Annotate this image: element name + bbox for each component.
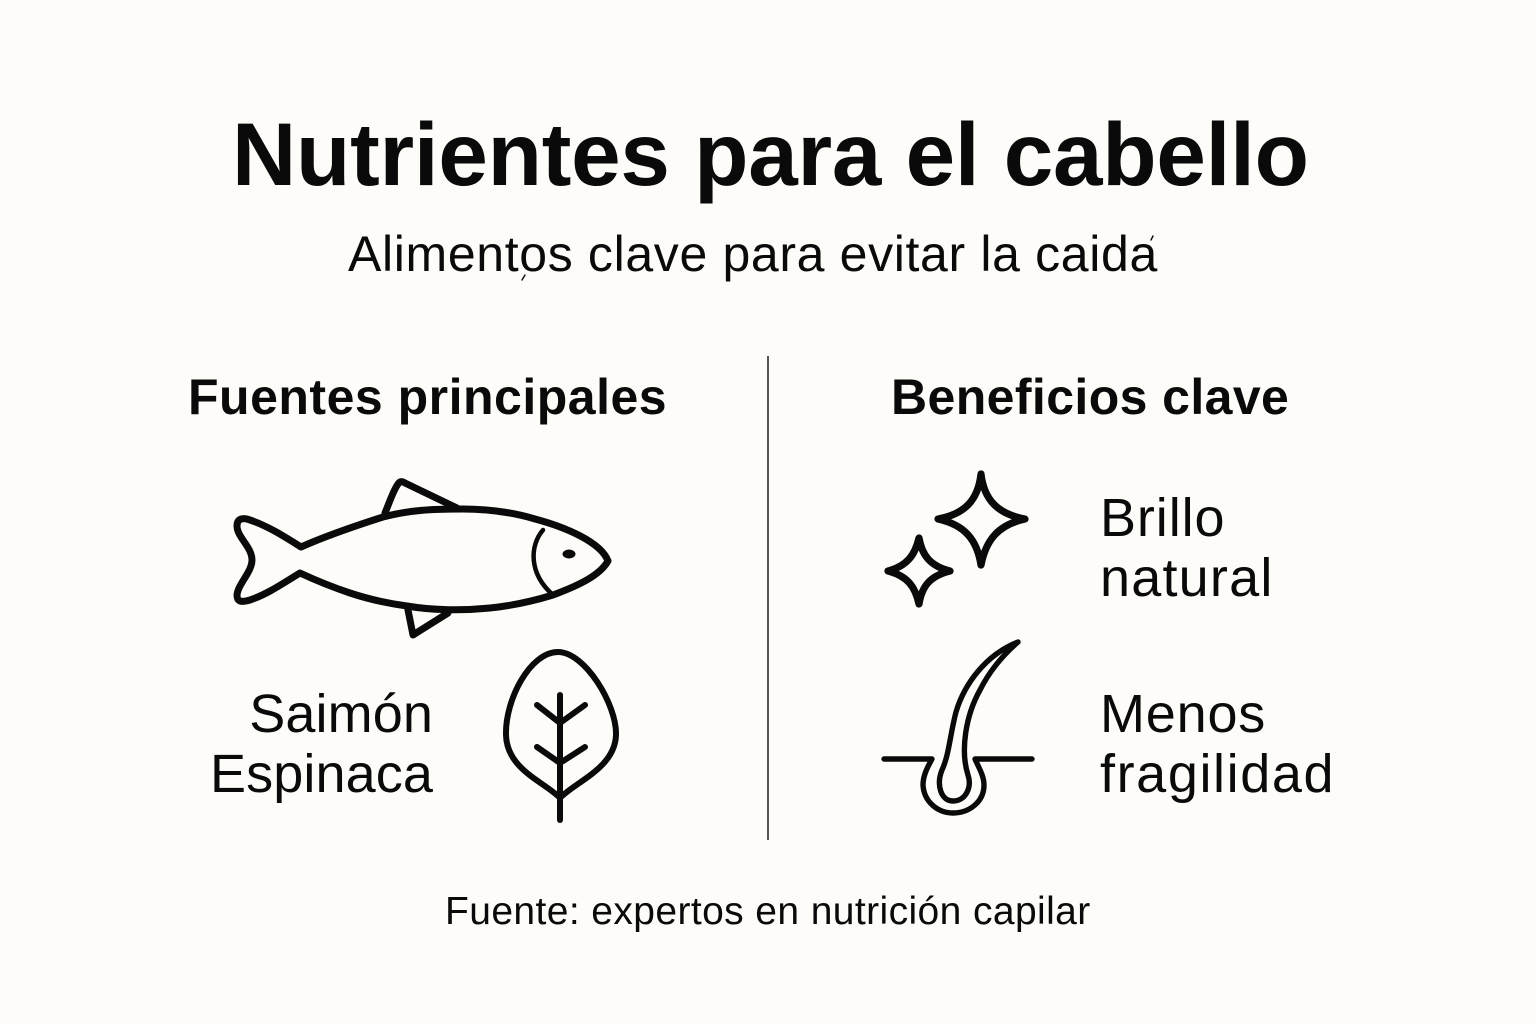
text: brillo natural: Brillo xyxy=(1100,488,1225,548)
heading: fuentes principales: Fuentes principales xyxy=(188,369,667,425)
text: saimon espinaca: Saimón xyxy=(249,684,433,744)
text: brillo natural: natural xyxy=(1100,548,1274,608)
subtitle: Alimentos clave para evitar la caida xyxy=(348,226,1158,282)
heading: beneficios clave: Beneficios clave xyxy=(891,369,1289,425)
text: saimon espinaca: Espinaca xyxy=(210,744,433,804)
column divider xyxy=(767,356,769,840)
text: menos fragilidad: fragilidad xyxy=(1100,744,1335,804)
text: menos fragilidad: Menos xyxy=(1100,684,1266,744)
text: menos fragilidad xyxy=(1100,684,1335,804)
title: Nutrientes para el cabello xyxy=(232,104,1309,204)
source note: Fuente: expertos en nutrición capilar xyxy=(445,890,1091,933)
text: saimon espinaca xyxy=(210,684,433,804)
text: brillo natural xyxy=(1100,488,1274,608)
